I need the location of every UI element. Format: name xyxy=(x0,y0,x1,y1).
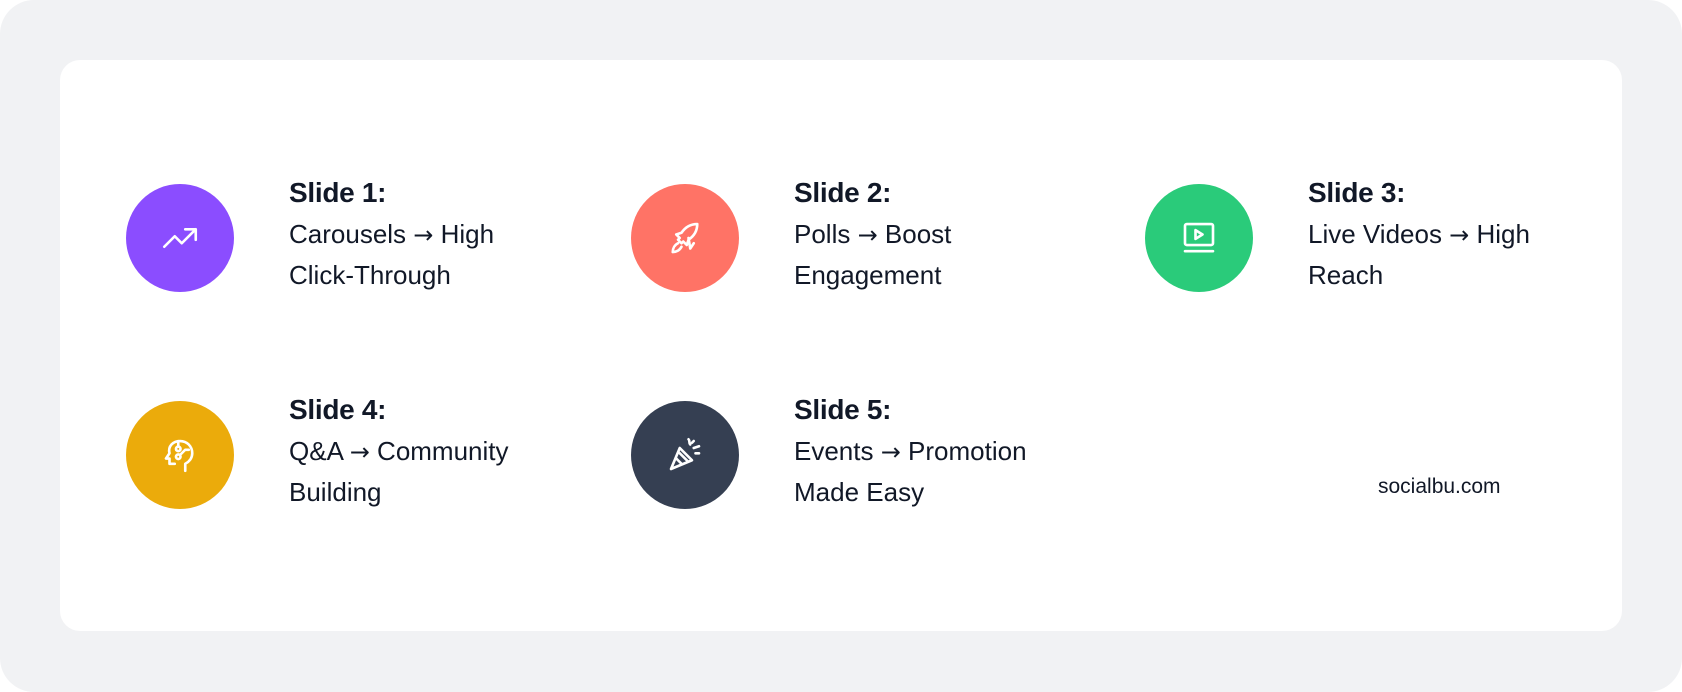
text: slide 5: Slide 5: xyxy=(794,394,891,425)
icon: head with circuits (slide 4) xyxy=(126,401,234,509)
icon: rocket (slide 2) xyxy=(631,184,739,292)
text: slide 2: Engagement xyxy=(794,260,941,290)
text: slide 4: Building xyxy=(289,477,382,507)
text: slide 2: Slide 2: xyxy=(794,177,891,208)
footer: brand url: socialbu.com xyxy=(1378,475,1501,498)
text: slide 2 xyxy=(794,177,952,290)
text: slide 3: Reach xyxy=(1308,260,1383,290)
text: slide 3 xyxy=(1308,177,1530,290)
text: slide 1: Slide 1: xyxy=(289,177,386,208)
icon: video screen (slide 3) xyxy=(1145,184,1253,292)
icon: trend arrow (slide 1) xyxy=(126,184,234,292)
text: slide 1 xyxy=(289,177,494,290)
text: slide 4 xyxy=(289,394,509,507)
text: slide 1: Carousels → High xyxy=(289,219,494,249)
text: slide 3: Slide 3: xyxy=(1308,177,1405,208)
text: slide 3: Live Videos → High xyxy=(1308,219,1530,249)
icon: party popper (slide 5) xyxy=(631,401,739,509)
text: slide 5: Made Easy xyxy=(794,477,924,507)
text: slide 2: Polls → Boost xyxy=(794,219,951,249)
text: slide 1: Click-Through xyxy=(289,260,451,290)
text: slide 4: Q&A → Community xyxy=(289,436,509,466)
card panel xyxy=(60,60,1622,631)
text: slide 4: Slide 4: xyxy=(289,394,386,425)
text: slide 5 xyxy=(794,394,1027,507)
text: slide 5: Events → Promotion xyxy=(794,436,1027,466)
